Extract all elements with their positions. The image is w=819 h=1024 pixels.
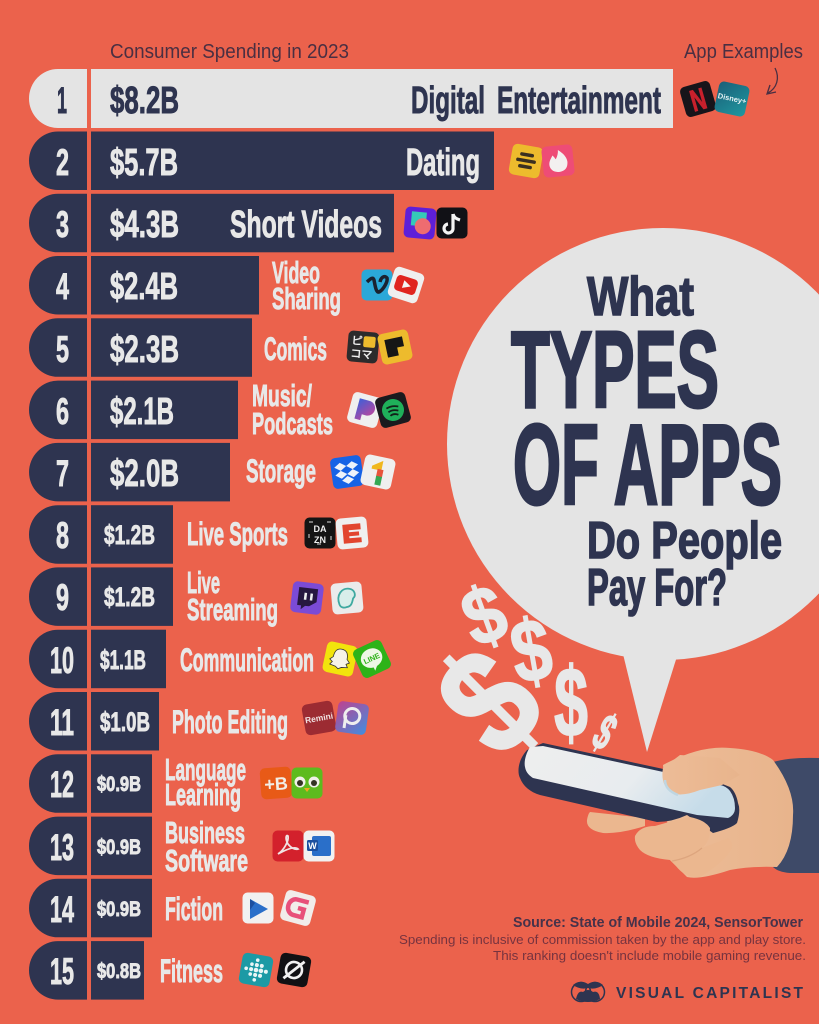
row 7: $2.0B	[110, 453, 179, 495]
row 11: 11	[50, 702, 74, 743]
row 11: Photo Editing	[172, 704, 288, 740]
icon: piccoma: コマ	[350, 348, 373, 362]
row 15: Fitness	[160, 953, 223, 989]
row 9: 9	[56, 577, 69, 618]
row 12: Learning	[165, 777, 241, 812]
row 8	[29, 505, 288, 564]
row 3: $4.3B	[110, 204, 179, 246]
icon: comics app yellow	[377, 329, 413, 365]
hand and phone	[518, 743, 819, 878]
icon: bigo dinosaur	[330, 581, 364, 615]
icon: disney plus	[714, 81, 750, 117]
row 6: 6	[56, 391, 69, 432]
icon: peloton	[276, 952, 312, 988]
dollar signs: $	[405, 617, 574, 786]
icon: fitbit	[238, 952, 274, 988]
row 10	[29, 630, 314, 688]
title	[511, 265, 782, 617]
row 1: $8.2B	[110, 80, 179, 122]
row 1: Entertainment	[497, 80, 661, 122]
thumb shadow	[665, 780, 678, 795]
row 8: 8	[56, 515, 69, 556]
row 8: Live Sports	[187, 516, 288, 552]
icon: microsoft word	[304, 830, 334, 862]
icon: bumble	[508, 143, 544, 179]
icon: babbel	[259, 766, 293, 800]
arrow: app examples	[767, 68, 777, 94]
icon: short video app	[403, 206, 437, 240]
icon: goodnovel	[279, 889, 317, 927]
dollar signs: $	[554, 648, 588, 758]
row 11: $1.0B	[100, 707, 150, 737]
row 9	[29, 565, 278, 627]
row 2	[29, 132, 494, 190]
icon: line	[351, 638, 393, 680]
row 6	[29, 378, 333, 441]
row 2: $5.7B	[110, 142, 178, 184]
icon: picsart	[334, 700, 370, 736]
header: consumer spending: Consumer Spending in 2023	[110, 41, 349, 63]
icon: piccoma	[346, 330, 380, 364]
icon: dazn: ZN	[314, 535, 326, 545]
icon: spotify	[374, 391, 412, 429]
row 13: Software	[165, 843, 248, 878]
source note	[399, 915, 806, 963]
thumb	[662, 755, 740, 794]
row 12	[29, 752, 246, 813]
row 4: 4	[56, 266, 69, 307]
row 9: Live	[187, 565, 220, 600]
finger separators	[672, 848, 702, 861]
icon: babbel: +B	[264, 773, 288, 795]
source note: Spending is inclusive of commission taken by the app and play store.	[399, 932, 806, 947]
row 5	[29, 318, 327, 377]
row 4: Sharing	[272, 281, 341, 316]
row 3	[29, 194, 394, 252]
dollar signs	[405, 567, 626, 786]
row 13: $0.9B	[97, 836, 141, 859]
row 13: Business	[165, 815, 245, 850]
row 15	[29, 941, 223, 1000]
row 14: Fiction	[165, 891, 223, 927]
title: Pay For?	[587, 559, 727, 617]
row 10: Communication	[180, 642, 314, 678]
icon: youtube	[386, 265, 426, 305]
icon: espn	[335, 516, 369, 550]
source note: This ranking doesn't include mobile gaming revenue.	[493, 948, 806, 963]
row 12: 12	[50, 764, 74, 805]
icon: remini: Remini	[304, 711, 334, 725]
dollar signs: $	[450, 567, 519, 665]
row 5: 5	[56, 329, 69, 370]
icon: vimeo	[362, 270, 392, 300]
lower fingers	[635, 817, 732, 877]
row 6: Podcasts	[252, 406, 333, 441]
row 8: $1.2B	[104, 520, 155, 550]
speech bubble	[447, 228, 819, 752]
row 13: 13	[50, 827, 74, 868]
row 13	[29, 815, 248, 878]
icon: remini	[301, 700, 337, 736]
icon: tiktok	[436, 208, 468, 238]
row 10: 10	[50, 640, 74, 681]
icon: play books	[242, 892, 274, 924]
back finger	[587, 812, 645, 833]
row 1: Digital	[411, 80, 485, 122]
row 7	[29, 443, 316, 501]
row 5: Comics	[264, 331, 327, 367]
row 1	[29, 69, 673, 128]
row 10: $1.1B	[100, 645, 146, 675]
phone screen	[525, 746, 735, 818]
icon: logo mark	[572, 982, 604, 1002]
row 12: $0.9B	[97, 773, 141, 796]
row 4: Video	[272, 255, 320, 290]
icon: dropbox	[329, 454, 365, 490]
row 14: 14	[50, 889, 74, 930]
row 4	[29, 255, 341, 316]
visual capitalist logo: VISUAL CAPITALIST	[616, 985, 804, 1002]
row 7: Storage	[246, 453, 316, 489]
icon: tinder	[541, 144, 575, 178]
row 1: 1	[57, 80, 67, 121]
row 14: $0.9B	[97, 898, 141, 921]
icon: disney plus: Disney+	[717, 91, 748, 106]
icon: pandora	[346, 391, 384, 429]
dollar signs: $	[503, 599, 559, 702]
header: app examples: App Examples	[684, 41, 803, 63]
row 4: $2.4B	[110, 266, 178, 308]
icon: line: LINE	[362, 651, 381, 666]
row 12: Language	[165, 752, 246, 787]
row 15: $0.8B	[97, 960, 141, 983]
palm	[663, 748, 793, 878]
row 2: Dating	[406, 142, 480, 184]
icon: dazn	[304, 518, 336, 548]
icon: twitch	[290, 581, 324, 615]
visual capitalist logo	[572, 982, 804, 1002]
phone body	[518, 743, 739, 833]
icon: snapchat	[322, 641, 358, 677]
row 9: $1.2B	[104, 582, 155, 612]
dollar signs: $	[584, 703, 626, 761]
title: What	[587, 265, 694, 327]
icon: duolingo	[292, 768, 322, 798]
row 6: $2.1B	[110, 391, 174, 433]
row 3: 3	[56, 204, 69, 245]
row 7: 7	[56, 453, 69, 494]
row 14	[29, 879, 223, 937]
row 6: Music/	[252, 378, 312, 413]
row 15: 15	[50, 951, 74, 992]
row 2: 2	[56, 142, 69, 183]
icon: dazn: DA	[314, 524, 327, 534]
row 11	[29, 692, 288, 750]
icon: google one	[360, 454, 396, 490]
row 5: $2.3B	[110, 329, 179, 371]
icon: netflix: N	[687, 83, 710, 118]
row 3: Short Videos	[230, 204, 382, 246]
source note: Source: State of Mobile 2024, SensorTower	[513, 915, 803, 931]
row 9: Streaming	[187, 592, 278, 627]
icon: piccoma: ピ	[351, 334, 363, 348]
icon: adobe acrobat	[272, 830, 304, 862]
sleeve	[773, 758, 819, 873]
icon: microsoft word: W	[308, 841, 317, 851]
